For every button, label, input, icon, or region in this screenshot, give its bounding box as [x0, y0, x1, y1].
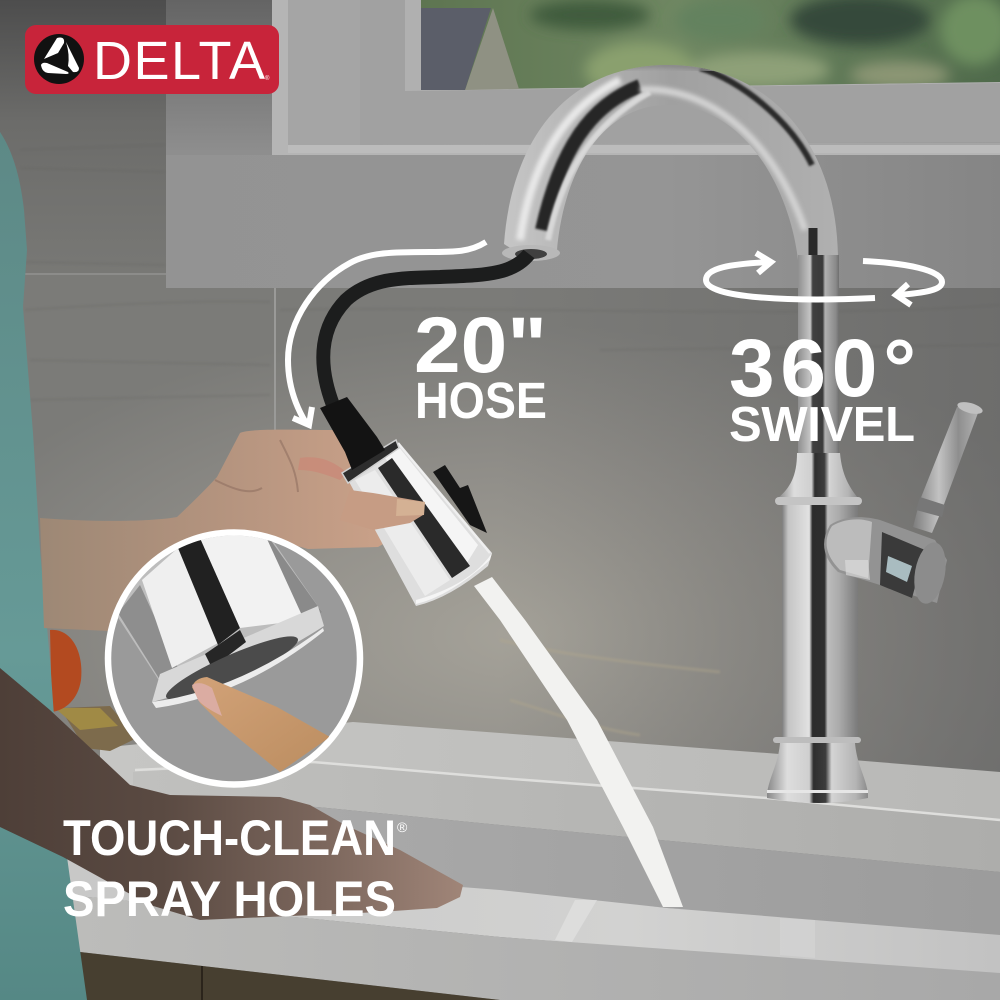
label: touch-clean spray holes: TOUCH-CLEAN	[63, 810, 396, 866]
sink reflections	[555, 900, 597, 942]
lever handle	[824, 400, 984, 606]
label: 360 degree swivel: SWIVEL	[729, 398, 915, 452]
label: touch-clean spray holes	[63, 810, 408, 927]
label: 20 inch hose: 20"	[414, 300, 547, 389]
label: 360 degree swivel: 360°	[729, 323, 916, 414]
arm and hand holding spray head	[40, 430, 426, 632]
logo mark	[34, 34, 84, 84]
counter and sink	[67, 722, 1000, 1000]
faucet body	[782, 505, 858, 738]
inset finger	[192, 677, 330, 772]
faucet collar	[778, 453, 858, 498]
Delta logo	[25, 25, 279, 94]
lower arm and hand on sink	[0, 668, 463, 920]
label: touch-clean spray holes: ®	[397, 819, 408, 835]
wood cabinet	[80, 952, 500, 1000]
house in window	[421, 8, 519, 90]
lever hub	[824, 517, 950, 606]
label: 20 inch hose	[414, 300, 547, 429]
hose arrow	[288, 242, 486, 425]
spray head body	[347, 443, 492, 606]
logo wordmark: DELTA	[93, 31, 265, 91]
tomato and cutting board	[50, 630, 137, 751]
faucet	[502, 64, 984, 803]
hose connector	[320, 397, 385, 470]
label: touch-clean spray holes: SPRAY HOLES	[63, 871, 396, 927]
hose	[323, 254, 529, 405]
teal towel	[0, 132, 87, 1000]
spray head	[320, 397, 492, 606]
label: 20 inch hose: HOSE	[415, 372, 547, 429]
inset spray head	[110, 525, 324, 709]
inset spray head rim	[152, 606, 324, 702]
water stream	[474, 577, 683, 907]
faucet base	[767, 743, 868, 803]
spray head buttons	[433, 465, 487, 533]
spray head collar	[342, 440, 399, 483]
thumb nail	[396, 499, 425, 516]
inset circle: touch-clean spray holes	[108, 525, 360, 784]
swivel arrows	[706, 253, 942, 305]
inset spray face	[166, 636, 298, 699]
Delta logo: ®	[265, 75, 270, 82]
thumb over spray head	[340, 490, 425, 530]
faucet stem	[798, 255, 839, 455]
faucet arch	[502, 64, 838, 262]
window with frame and garden view	[272, 0, 1000, 155]
